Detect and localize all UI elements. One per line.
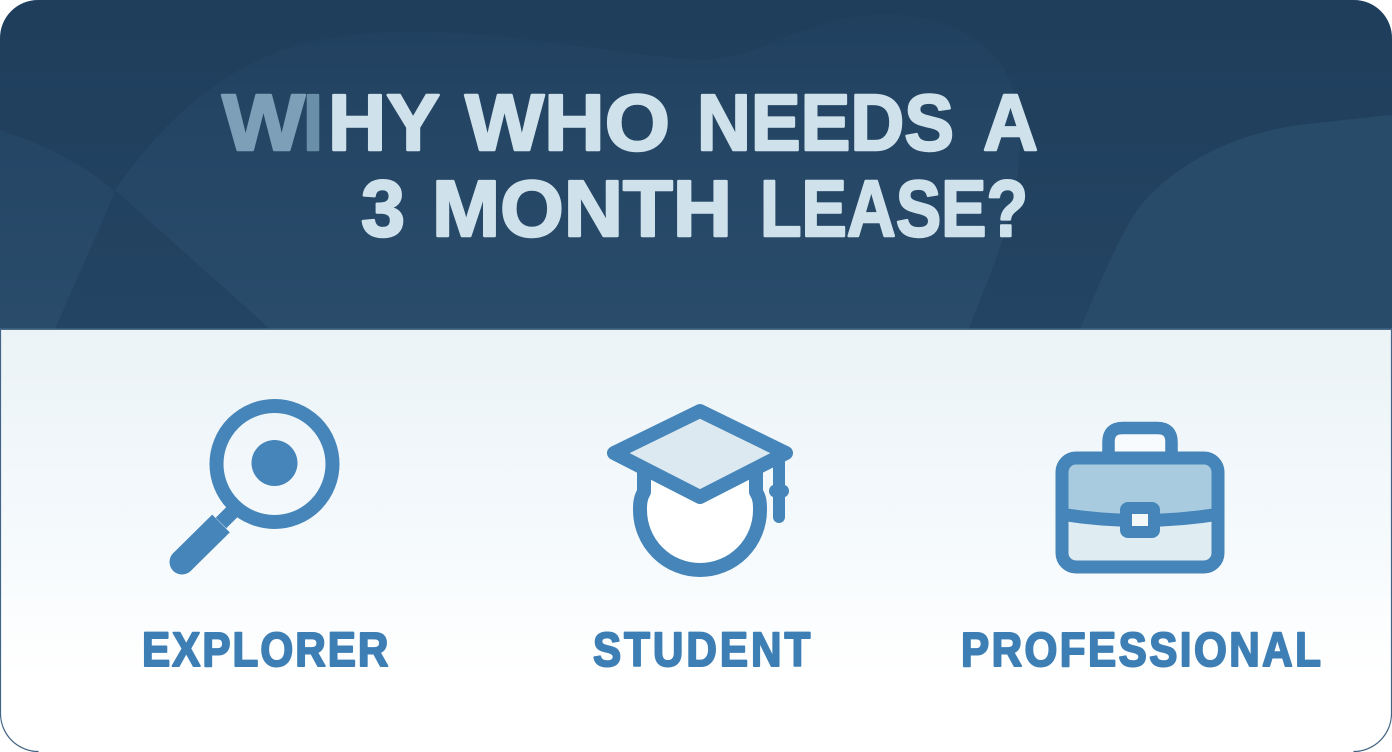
icon: briefcase bbox=[1060, 428, 1220, 567]
icon: magnifying glass bbox=[170, 406, 332, 574]
title line 1: NEEDS bbox=[697, 78, 954, 167]
title ghost letters: W bbox=[222, 78, 306, 167]
label: explorer: EXPLORER bbox=[142, 622, 388, 677]
card outline bbox=[0, 330, 1392, 752]
title line 1: A bbox=[983, 78, 1038, 167]
title line 1 bbox=[328, 78, 1038, 167]
title ghost letters: I bbox=[303, 78, 323, 167]
title line 1: HY bbox=[328, 78, 440, 167]
panel: header background bbox=[0, 0, 1392, 330]
title bbox=[222, 78, 1038, 253]
title line 2: MONTH bbox=[432, 164, 732, 253]
panel: lower content background bbox=[1, 330, 1391, 562]
title line 2 bbox=[361, 164, 1028, 253]
title line 2: 3 bbox=[361, 164, 405, 253]
label: professional: PROFESSIONAL bbox=[961, 622, 1321, 677]
icon: graduation cap bbox=[614, 411, 786, 570]
title line 1: WHO bbox=[465, 78, 670, 167]
title line 2: LEASE? bbox=[760, 164, 1028, 253]
label: student: STUDENT bbox=[593, 622, 811, 677]
